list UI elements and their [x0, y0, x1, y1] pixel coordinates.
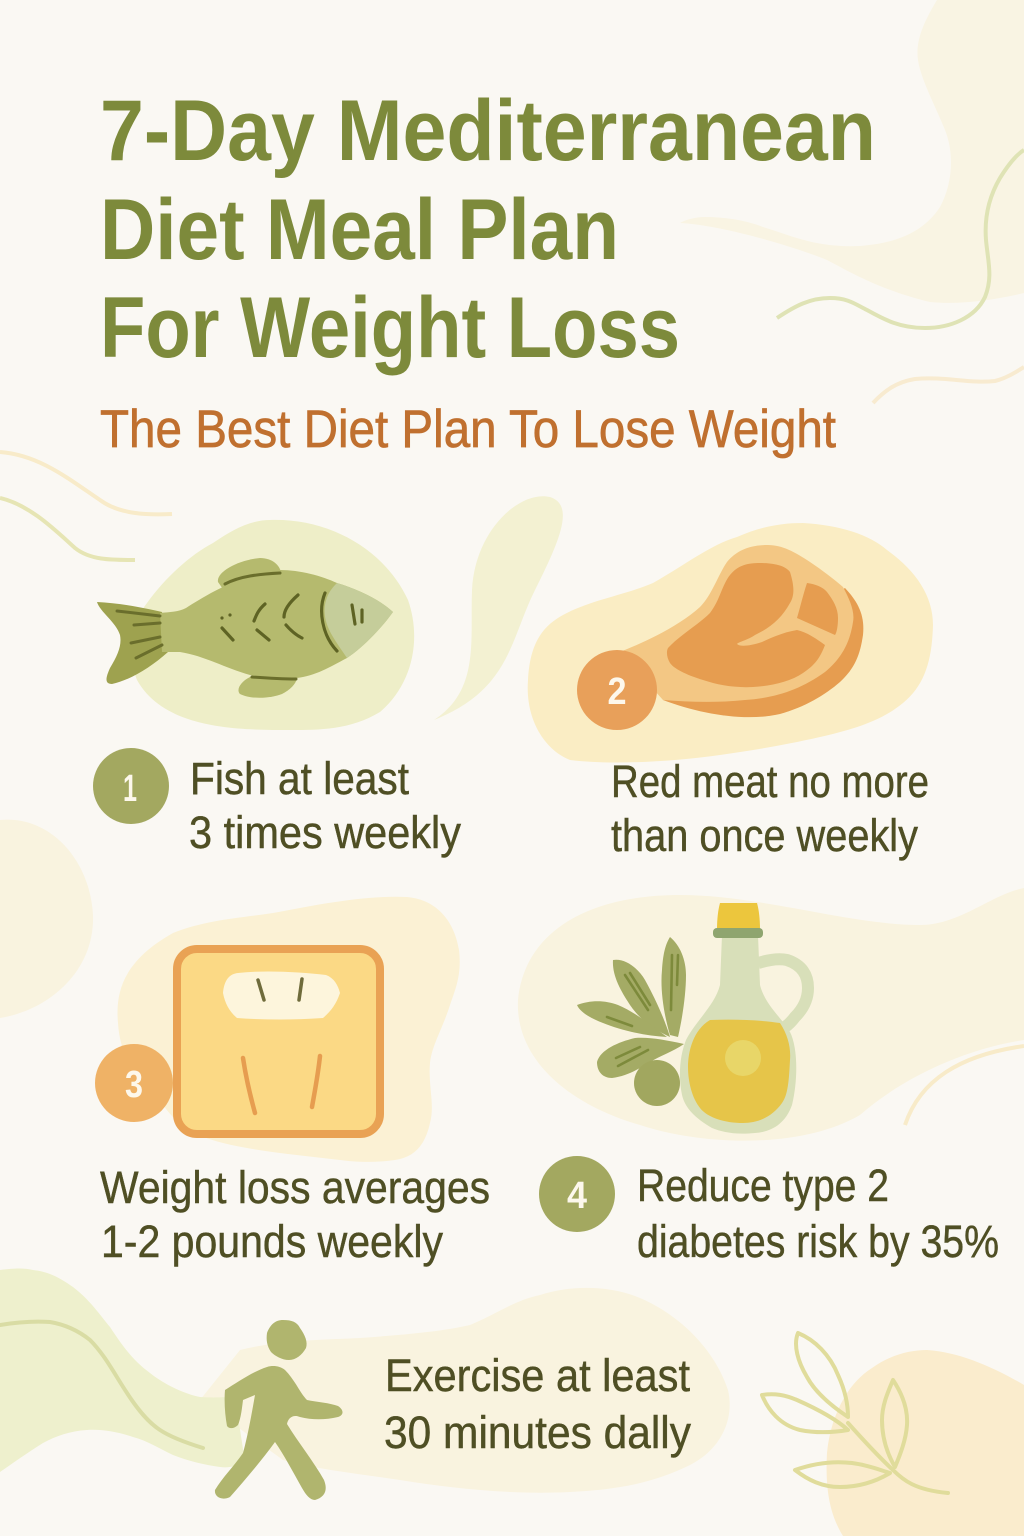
title: 7-Day Mediterranean	[100, 83, 876, 179]
badge 2: 2	[608, 671, 626, 713]
badge 2	[577, 650, 657, 730]
icon: steak	[620, 545, 863, 717]
panel: fish	[97, 520, 414, 730]
text: fish: 3 times weekly	[189, 807, 461, 858]
decorative corner blob and leaves	[762, 1333, 1024, 1536]
scale background blob	[118, 897, 460, 1162]
text: red meat: Red meat no more	[611, 756, 929, 807]
panel: exercise	[0, 1268, 730, 1500]
text: weight loss	[100, 1162, 490, 1267]
title: For Weight Loss	[100, 280, 680, 376]
text: red meat	[611, 756, 929, 861]
text: exercise: Exercise at least	[385, 1350, 690, 1401]
text: fish	[189, 753, 461, 858]
text: exercise	[384, 1350, 691, 1458]
left wave blob	[0, 1268, 245, 1472]
text: exercise: 30 minutes dally	[384, 1407, 691, 1458]
badge 1: 1	[123, 768, 137, 810]
panel: olive oil	[518, 888, 1024, 1141]
fish background blob	[130, 520, 414, 730]
badge 3	[95, 1044, 173, 1122]
badge 4: 4	[567, 1175, 587, 1217]
panel: red meat	[528, 523, 933, 762]
icon: walking person	[215, 1320, 342, 1500]
icon: fish	[97, 558, 393, 698]
icon: leaf sprig	[762, 1333, 948, 1493]
text: fish: Fish at least	[190, 753, 409, 804]
icon: olive oil bottle	[577, 903, 808, 1134]
text: diabetes	[637, 1160, 999, 1267]
meat background blob	[528, 523, 933, 762]
oil background blob	[518, 888, 1024, 1141]
text: red meat: than once weekly	[611, 810, 918, 861]
title	[100, 83, 876, 376]
badge 1	[93, 748, 169, 824]
subtitle: The Best Diet Plan To Lose Weight	[100, 400, 836, 459]
icon: bathroom scale	[177, 949, 380, 1134]
badge 3: 3	[125, 1064, 143, 1106]
badge 4	[539, 1156, 615, 1232]
text: weight loss: 1-2 pounds weekly	[101, 1216, 443, 1267]
text: weight loss: Weight loss averages	[100, 1162, 490, 1213]
panel: scale	[95, 897, 460, 1162]
text: diabetes: Reduce type 2	[637, 1160, 889, 1211]
title: Diet Meal Plan	[100, 182, 619, 278]
cream blob	[200, 1288, 730, 1493]
